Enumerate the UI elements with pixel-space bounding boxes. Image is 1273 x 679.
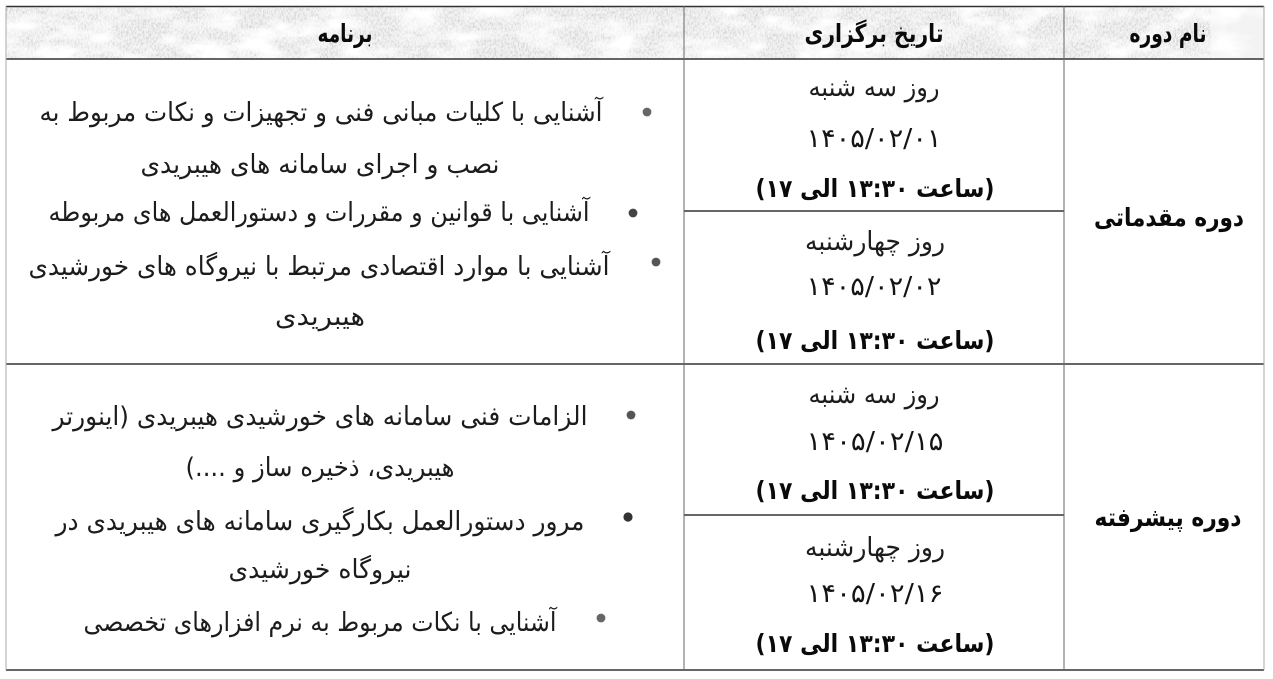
panel: dates for advanced course bbox=[756, 380, 994, 658]
session time: (ساعت ۱۳:۳۰ الی ۱۷) bbox=[756, 476, 994, 505]
program line: هیبریدی bbox=[275, 302, 365, 332]
panel: dates for introductory course bbox=[756, 73, 994, 355]
bullet icon bbox=[597, 614, 605, 622]
session day: روز سه شنبه bbox=[808, 380, 940, 410]
program line: آشنایی با نکات مربوط به نرم افزارهای تخصصی bbox=[84, 606, 558, 638]
session day: روز سه شنبه bbox=[808, 73, 940, 103]
program line: نصب و اجرای سامانه های هیبریدی bbox=[140, 150, 500, 180]
program line: هیبریدی، ذخیره ساز و ....) bbox=[186, 453, 454, 483]
course name: introductory: دوره مقدماتی bbox=[1094, 203, 1244, 233]
program line: آشنایی با موارد اقتصادی مرتبط با نیروگاه های خورشیدی bbox=[28, 250, 611, 282]
header background bbox=[6, 7, 1264, 59]
heading: course name: نام دوره bbox=[1130, 19, 1206, 49]
session day: روز چهارشنبه bbox=[805, 227, 945, 257]
panel: advanced course program bbox=[51, 402, 635, 638]
session time: (ساعت ۱۳:۳۰ الی ۱۷) bbox=[756, 629, 994, 658]
session date: ۱۴۰۵/۰۲/۰۱ bbox=[806, 124, 942, 154]
program line: آشنایی با قوانین و مقررات و دستورالعمل های مربوطه bbox=[48, 196, 591, 228]
session date: ۱۴۰۵/۰۲/۱۶ bbox=[806, 579, 944, 609]
session time: (ساعت ۱۳:۳۰ الی ۱۷) bbox=[756, 174, 994, 203]
panel: introductory course program bbox=[28, 96, 660, 332]
session date: ۱۴۰۵/۰۲/۱۵ bbox=[806, 427, 944, 457]
program line: آشنایی با کلیات مبانی فنی و تجهیزات و نکات مربوط به bbox=[40, 96, 604, 128]
bullet icon bbox=[652, 258, 660, 266]
heading: program: برنامه bbox=[318, 19, 372, 49]
bullet icon bbox=[629, 209, 637, 217]
bullet icon bbox=[643, 108, 651, 116]
session time: (ساعت ۱۳:۳۰ الی ۱۷) bbox=[756, 326, 994, 355]
program line: نیروگاه خورشیدی bbox=[228, 554, 412, 585]
bullet icon bbox=[627, 411, 635, 419]
program line: مرور دستورالعمل بکارگیری سامانه های هیبریدی در bbox=[54, 506, 585, 537]
course name: advanced: دوره پیشرفته bbox=[1094, 503, 1242, 533]
bullet icon bbox=[623, 512, 633, 522]
session day: روز چهارشنبه bbox=[805, 533, 945, 563]
heading: date: تاریخ برگزاری bbox=[804, 19, 944, 49]
program line: الزامات فنی سامانه های خورشیدی هیبریدی (اینورتر bbox=[51, 402, 588, 432]
session date: ۱۴۰۵/۰۲/۰۲ bbox=[806, 272, 942, 302]
